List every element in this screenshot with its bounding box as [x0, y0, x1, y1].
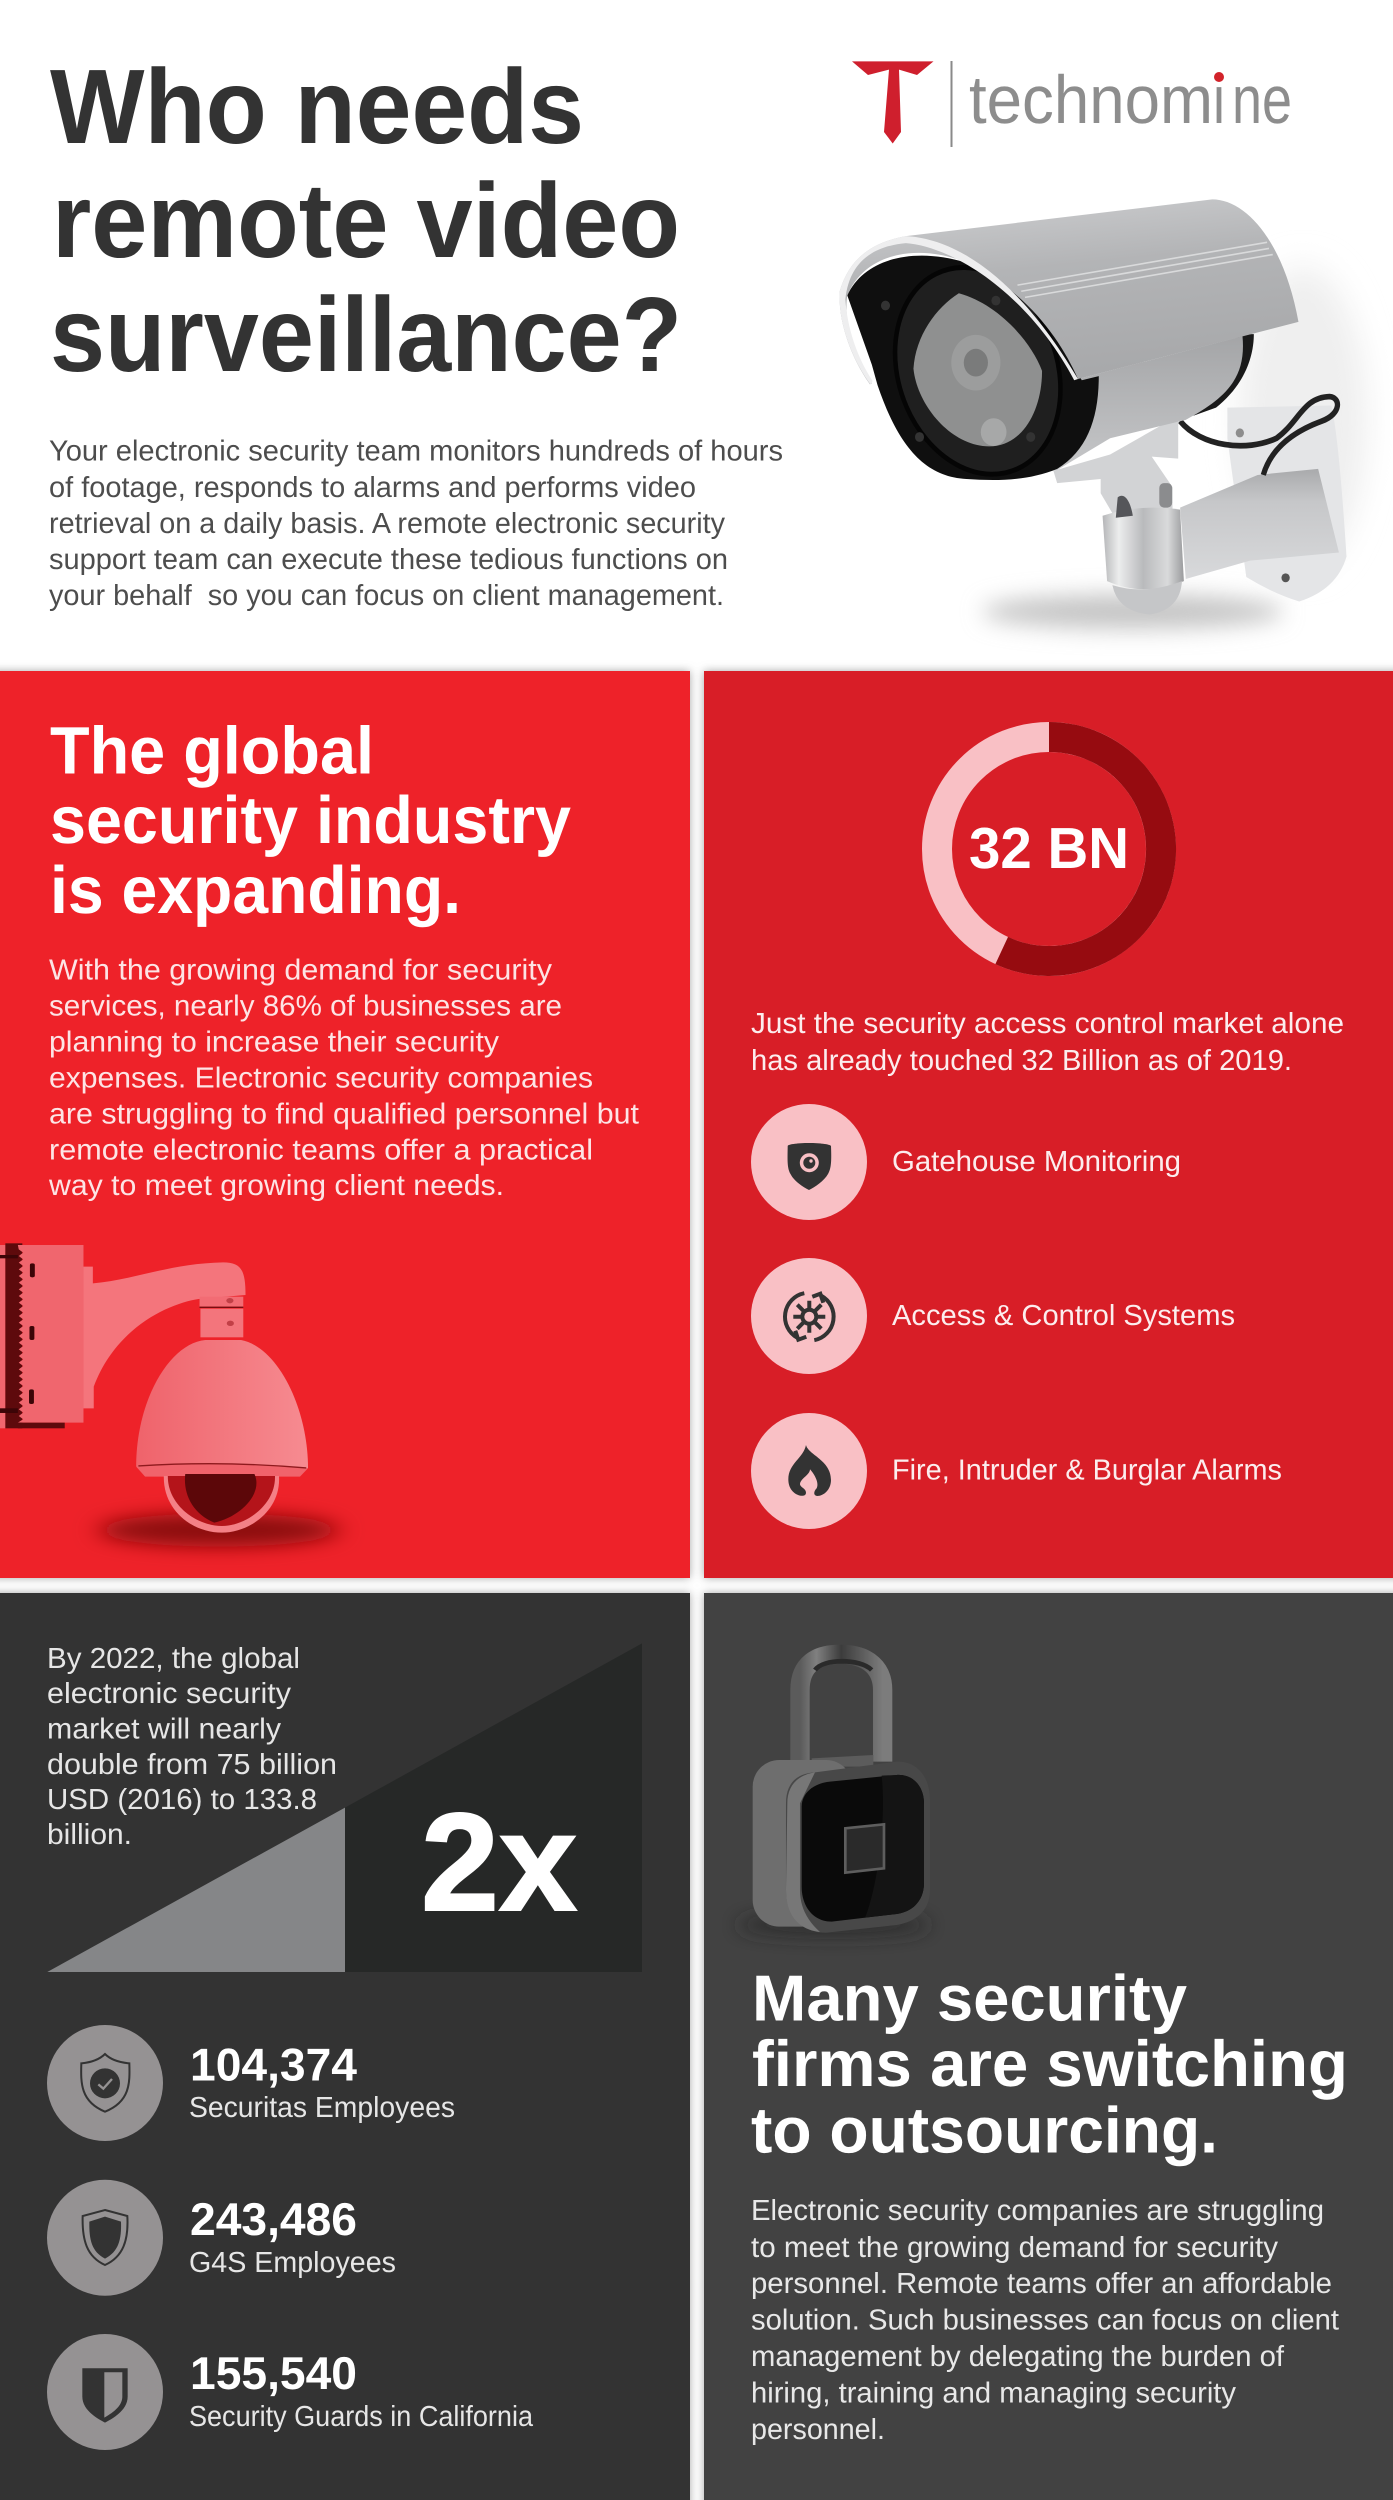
- market text: has already touched 32 Billion as of 2019.: [751, 1045, 1292, 1077]
- title: [50, 48, 682, 394]
- body text: Electronic security companies are struggling: [751, 2195, 1324, 2227]
- panel: market doubling and employee stats: [0, 1593, 690, 2500]
- market text: USD (2016) to 133.8: [47, 1784, 317, 1816]
- intro text block: of footage, responds to alarms and performs video: [49, 472, 696, 504]
- body text: planning to increase their security: [49, 1027, 500, 1059]
- body text: hiring, training and managing security: [751, 2378, 1237, 2410]
- stat: G4S employees: [47, 2180, 396, 2296]
- icon: shield eye: [788, 1143, 831, 1190]
- market text: electronic security: [47, 1678, 292, 1710]
- body text: personnel.: [751, 2414, 885, 2446]
- body text: remote electronic teams offer a practical: [49, 1134, 593, 1166]
- heading: Many security: [752, 1962, 1187, 2035]
- heading: is expanding.: [50, 853, 461, 928]
- market text: market will nearly: [47, 1714, 282, 1746]
- panel: global security industry: [0, 671, 690, 1578]
- logo wordmark: technom: [969, 62, 1213, 138]
- value: 155,540: [190, 2347, 357, 2399]
- body text: personnel. Remote teams offer an affordable: [751, 2268, 1332, 2300]
- logo wordmark: i: [1213, 62, 1225, 138]
- icon: shield check: [81, 2054, 129, 2112]
- title: Who needs: [50, 48, 584, 166]
- value: 2x: 2x: [421, 1785, 577, 1940]
- chart: 2x growth triangle: [47, 1643, 642, 1972]
- title: surveillance?: [50, 276, 682, 394]
- illustration: padlock: [737, 1654, 930, 1936]
- label: Securitas Employees: [189, 2092, 455, 2124]
- label: Gatehouse Monitoring: [892, 1146, 1181, 1178]
- item: gatehouse monitoring: [751, 1104, 1181, 1220]
- heading: to outsourcing.: [751, 2094, 1218, 2167]
- intro text block: Your electronic security team monitors hundreds of hours: [49, 436, 783, 468]
- donut chart: [937, 737, 1161, 961]
- heading: [751, 1962, 1348, 2167]
- body text: to meet the growing demand for security: [751, 2232, 1278, 2264]
- label: Security Guards in California: [189, 2401, 534, 2433]
- intro text block: [49, 436, 783, 612]
- logo wordmark: ne: [1232, 62, 1292, 138]
- market text: By 2022, the global: [47, 1643, 300, 1675]
- body text: expenses. Electronic security companies: [49, 1063, 593, 1095]
- heading: The global: [50, 714, 374, 789]
- intro text block: retrieval on a daily basis. A remote electronic security: [49, 508, 725, 540]
- label: Fire, Intruder & Burglar Alarms: [892, 1455, 1282, 1487]
- body text: [48, 955, 639, 1202]
- body text: are struggling to find qualified personnel but: [49, 1098, 639, 1130]
- market text: billion.: [47, 1819, 132, 1851]
- panel: 32 BN market: [704, 671, 1393, 1578]
- stat: security guards in California: [47, 2334, 534, 2450]
- body text: [751, 2195, 1339, 2446]
- market text: [47, 1643, 337, 1851]
- body text: way to meet growing client needs.: [48, 1170, 504, 1202]
- icon: double shield: [83, 2210, 128, 2265]
- donut value: 32 BN: [969, 816, 1129, 881]
- illustration: dome camera: [0, 1243, 339, 1547]
- value: 104,374: [190, 2038, 357, 2090]
- market text: Just the security access control market alone: [751, 1008, 1344, 1040]
- intro text block: support team can execute these tedious functions on: [49, 544, 728, 576]
- intro text block: your behalf so you can focus on client management.: [49, 580, 724, 612]
- body text: solution. Such businesses can focus on client: [751, 2305, 1339, 2337]
- body text: With the growing demand for security: [49, 955, 553, 987]
- value: 243,486: [190, 2193, 357, 2245]
- panel: switching to outsourcing: [704, 1593, 1393, 2500]
- label: Access & Control Systems: [892, 1300, 1235, 1332]
- stat: Securitas employees: [47, 2025, 455, 2141]
- heading: security industry: [50, 783, 571, 858]
- icon: T tie mark: [852, 61, 934, 144]
- body text: management by delegating the burden of: [751, 2341, 1285, 2373]
- item: access and control systems: [751, 1258, 1235, 1374]
- market text: double from 75 billion: [47, 1749, 337, 1781]
- heading: firms are switching: [752, 2027, 1348, 2100]
- icon: half shield: [82, 2368, 128, 2423]
- icon: gear with arrows: [785, 1293, 834, 1340]
- title: remote video: [52, 162, 680, 280]
- illustration: bullet security camera: [840, 199, 1367, 629]
- market text: [751, 1008, 1344, 1077]
- item: fire and burglar alarms: [751, 1413, 1282, 1529]
- heading: [50, 714, 571, 928]
- logo: technomine: [852, 61, 1292, 147]
- label: G4S Employees: [189, 2247, 396, 2279]
- body text: services, nearly 86% of businesses are: [49, 991, 562, 1023]
- icon: flame: [788, 1445, 831, 1496]
